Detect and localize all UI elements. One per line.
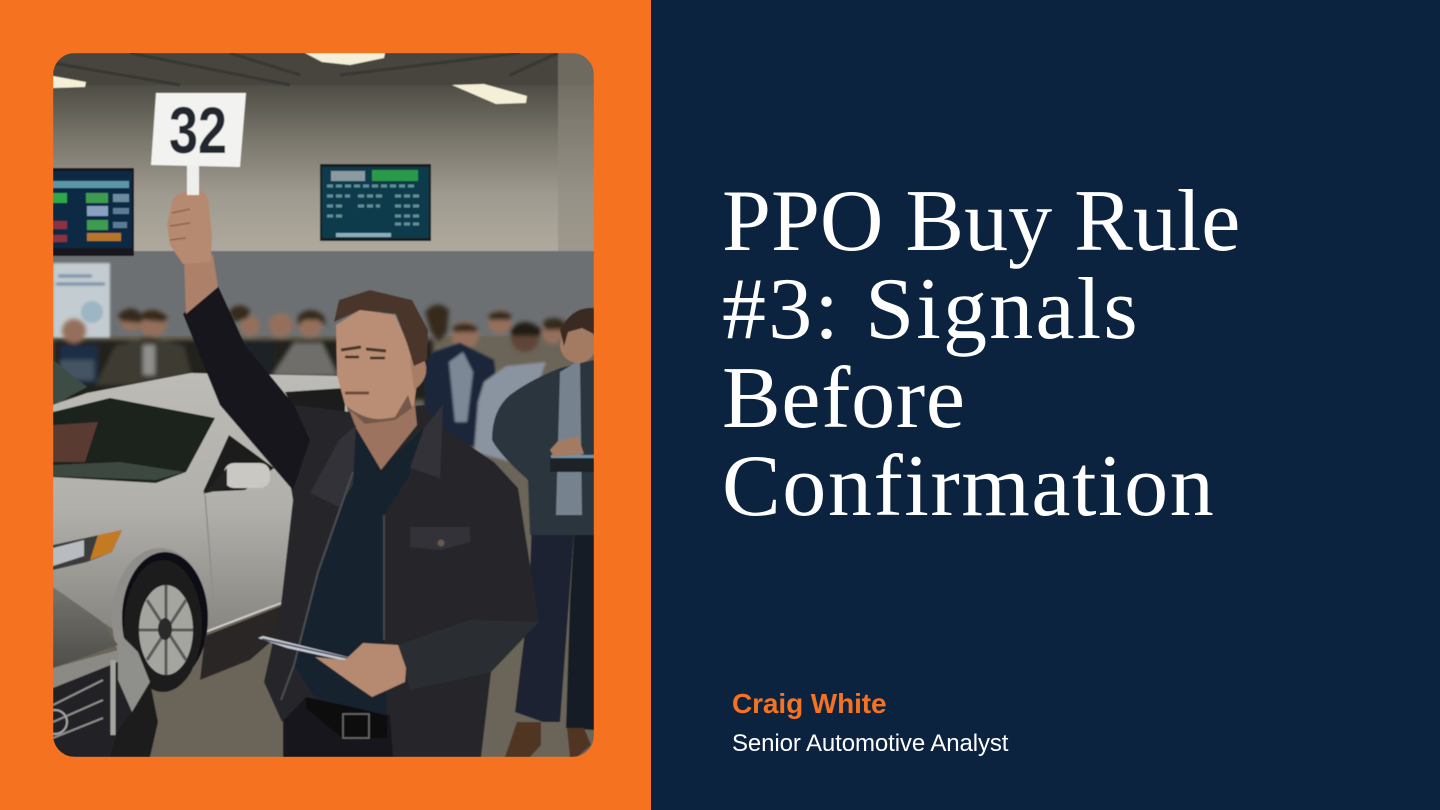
bid paddle showing number 32: 32 (169, 93, 227, 167)
bid paddle showing number 32 (151, 93, 246, 195)
handheld papers (258, 635, 348, 661)
man's lower hand (315, 643, 406, 697)
left auction monitor (53, 168, 134, 256)
auction hall background (53, 53, 594, 757)
title: Before (722, 350, 966, 447)
right auction monitor (320, 164, 431, 241)
author name: Craig White (732, 688, 886, 719)
title (722, 173, 1240, 535)
man's trousers and belt (283, 695, 398, 757)
right man with tablet (492, 308, 596, 757)
navy suited man and gray shirted man (424, 343, 546, 462)
title: PPO Buy Rule (722, 173, 1240, 270)
title: #3: Signals (722, 261, 1140, 358)
panel: orange left background (0, 0, 651, 810)
title: Confirmation (722, 438, 1215, 535)
wall poster (53, 263, 110, 338)
author role: Senior Automotive Analyst (732, 730, 1008, 757)
crowd of bidders (53, 304, 565, 400)
foreground car hood and grille (43, 587, 158, 757)
man's head (334, 290, 428, 424)
panel: navy right background (651, 0, 1440, 810)
photo: bidder raising paddle at a car auction (53, 53, 594, 757)
man's jacket and shirt (183, 286, 539, 757)
man's raised arm and hand (167, 188, 218, 314)
silver sedan (53, 360, 350, 692)
